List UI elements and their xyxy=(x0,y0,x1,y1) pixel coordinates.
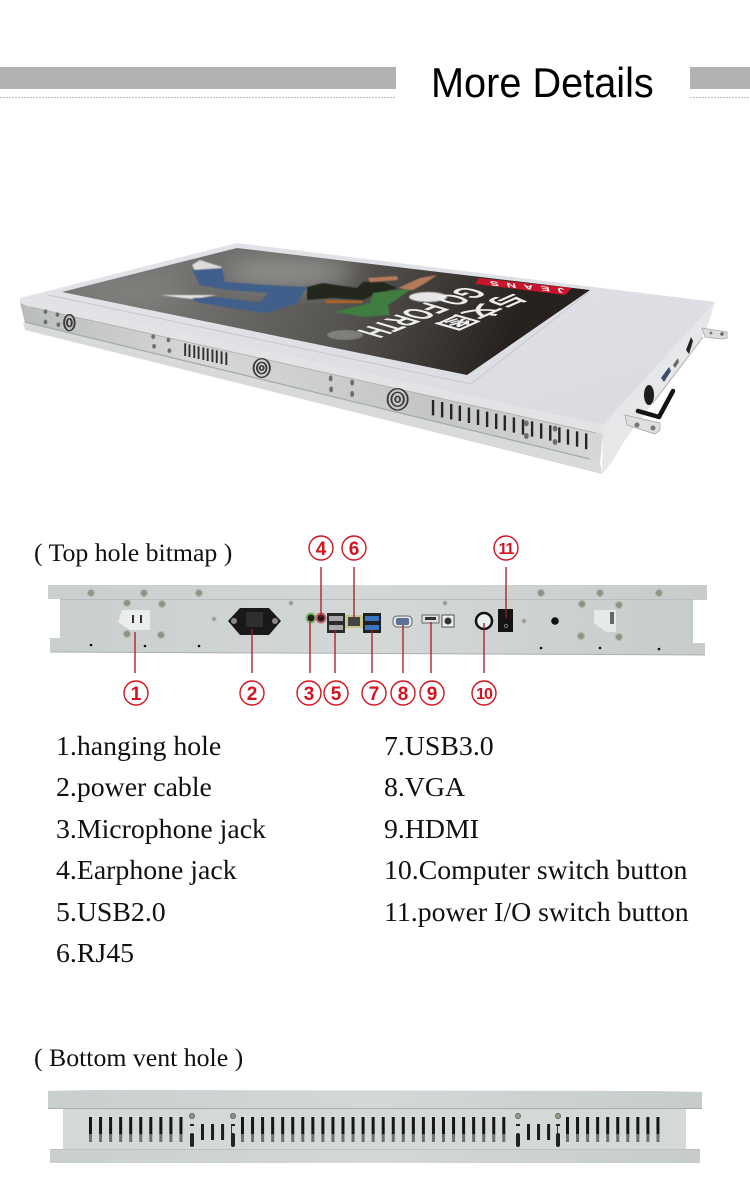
upper mounting bracket xyxy=(702,328,727,339)
side vents xyxy=(185,343,226,365)
legend left column: 6.RJ45 xyxy=(56,938,134,969)
panel top flange xyxy=(48,1090,702,1108)
legend right column: 10.Computer switch button xyxy=(384,855,688,886)
jumping figure xyxy=(160,260,447,317)
right header bar xyxy=(690,67,750,89)
legend left column: 1.hanging hole xyxy=(56,731,221,762)
USB 2.0 ports xyxy=(327,613,345,633)
legend left column: 3.Microphone jack xyxy=(56,814,266,845)
power socket xyxy=(228,608,281,635)
vent slots xyxy=(89,1126,662,1138)
heading: bottom vent hole: ( Bottom vent hole ) xyxy=(34,1043,243,1072)
lower flange xyxy=(23,322,602,474)
VGA port xyxy=(393,616,412,627)
callout 7: 7 xyxy=(369,684,379,705)
callout 9 xyxy=(420,681,444,705)
right hanging hole xyxy=(594,610,616,632)
end-face ports xyxy=(644,337,693,405)
heading: top hole bitmap: ( Top hole bitmap ) xyxy=(34,538,232,567)
legend right column: 9.HDMI xyxy=(384,814,479,845)
left hanging hole xyxy=(118,610,150,630)
callout 3 xyxy=(297,681,321,705)
screen background xyxy=(62,248,590,375)
callout 10 xyxy=(472,681,496,705)
USB 3.0 ports xyxy=(363,613,381,633)
left header bar xyxy=(0,67,396,89)
antenna xyxy=(638,391,673,417)
panel inner face xyxy=(63,1108,686,1149)
callout 9: 9 xyxy=(427,684,437,705)
front lip xyxy=(20,298,603,434)
panel bottom flange xyxy=(50,1149,700,1163)
screws xyxy=(88,590,662,640)
header banner xyxy=(0,59,750,106)
callout 2 xyxy=(240,681,264,705)
computer switch button xyxy=(476,613,492,629)
legend left column xyxy=(56,731,266,969)
microphone jack xyxy=(306,614,316,622)
callout 8 xyxy=(391,681,415,705)
top surface xyxy=(20,243,715,425)
callout 11: 11 xyxy=(499,541,515,558)
callout 2: 2 xyxy=(247,684,257,705)
callout 11 xyxy=(494,536,518,560)
banner text: JEANS xyxy=(481,278,566,293)
lower mounting bracket xyxy=(625,415,660,434)
power rocker switch xyxy=(498,609,513,632)
HDMI port xyxy=(422,615,439,623)
callout leader lines xyxy=(135,567,506,673)
legend right column xyxy=(384,731,689,928)
RJ45 port xyxy=(345,615,363,628)
callout 1 xyxy=(124,681,148,705)
callout 10: 10 xyxy=(476,686,493,703)
legend left column: 2.power cable xyxy=(56,772,212,803)
top panel photo xyxy=(48,585,707,655)
legend right column: 8.VGA xyxy=(384,772,465,803)
callout 4: 4 xyxy=(316,539,327,560)
side fan grilles xyxy=(64,315,408,410)
legend left column: 4.Earphone jack xyxy=(56,855,237,886)
poster Chinese headline: 与文图 xyxy=(429,290,536,332)
callout 3: 3 xyxy=(304,684,314,705)
legend left column: 5.USB2.0 xyxy=(56,897,166,928)
earphone jack xyxy=(316,614,326,622)
side face recess xyxy=(20,303,603,464)
red banner xyxy=(475,278,572,295)
end face xyxy=(602,302,715,474)
callout 7 xyxy=(362,681,386,705)
bottom panel photo xyxy=(48,1090,702,1163)
mounting screws and keyholes xyxy=(190,1114,560,1147)
callout 1: 1 xyxy=(131,684,142,705)
title: More Details xyxy=(431,59,654,106)
panel body xyxy=(48,585,707,655)
screen xyxy=(62,248,590,375)
small holes xyxy=(90,617,660,650)
callout 6: 6 xyxy=(349,539,359,560)
product photo: tablet in perspective xyxy=(20,243,727,474)
DC port xyxy=(442,615,454,627)
side screws xyxy=(44,309,557,445)
callout 6 xyxy=(342,536,366,560)
legend right column: 7.USB3.0 xyxy=(384,731,494,762)
callout 5: 5 xyxy=(331,684,342,705)
callout 4 xyxy=(309,536,333,560)
legend right column: 11.power I/O switch button xyxy=(384,897,689,928)
poster headline: GO FORTH xyxy=(347,284,495,340)
callout 5 xyxy=(324,681,348,705)
callout 8: 8 xyxy=(398,684,408,705)
